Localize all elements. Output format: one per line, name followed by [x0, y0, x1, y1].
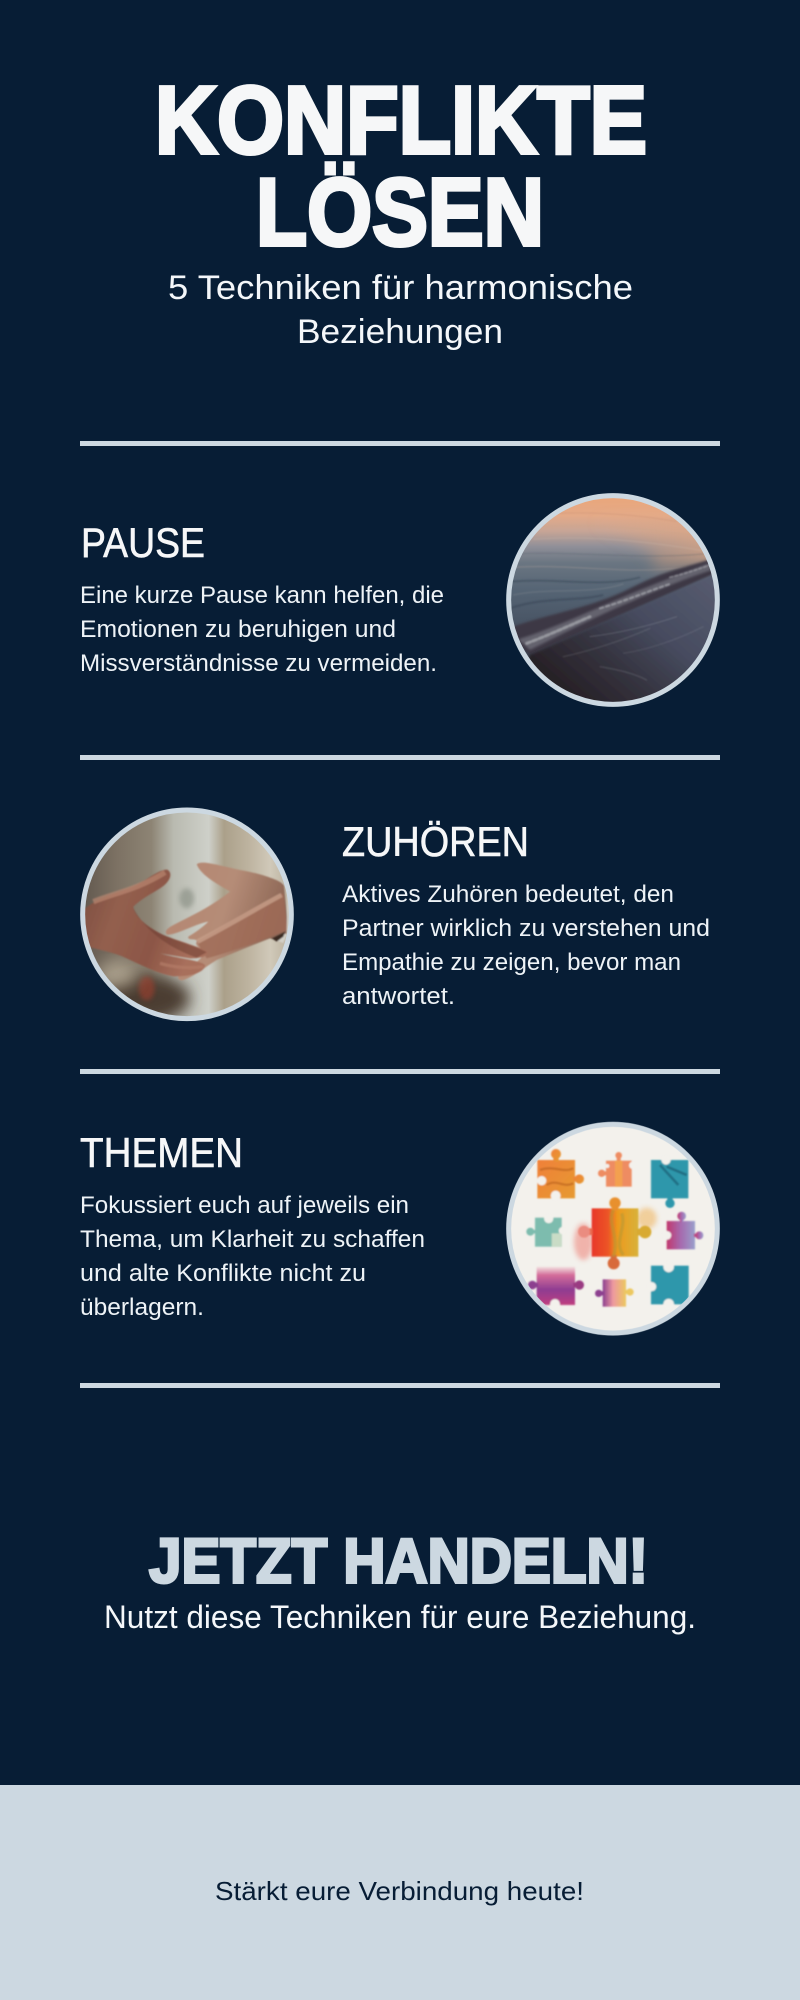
title: LÖSEN — [256, 159, 544, 266]
text block: zuhören: antwortet. — [342, 983, 455, 1010]
panel: themen — [80, 1120, 723, 1340]
subtitle: 5 Techniken für harmonische — [168, 269, 633, 307]
text block: themen: Thema, um Klarheit zu schaffen — [80, 1226, 425, 1253]
text block: themen: überlagern. — [80, 1294, 204, 1321]
footer text: Stärkt eure Verbindung heute! — [215, 1876, 584, 1906]
image: reaching hands — [77, 805, 297, 1025]
panel: zuhören — [77, 805, 710, 1025]
text block: zuhören: Empathie zu zeigen, bevor man — [342, 949, 681, 976]
heading: pause: PAUSE — [81, 519, 205, 566]
subtitle: Beziehungen — [297, 313, 503, 351]
panel: pause — [80, 490, 730, 713]
text block: zuhören — [342, 881, 710, 1010]
subtitle — [168, 269, 633, 351]
text block: pause: Missverständnisse zu vermeiden. — [80, 650, 437, 677]
title — [155, 67, 647, 266]
heading: themen: THEMEN — [80, 1129, 243, 1176]
text block: themen: und alte Konflikte nicht zu — [80, 1260, 366, 1287]
left hand — [83, 870, 207, 976]
text block: pause: Eine kurze Pause kann helfen, die — [80, 582, 444, 609]
title: KONFLIKTE — [155, 67, 647, 174]
image: beach at dusk — [503, 490, 730, 713]
call to action text: Nutzt diese Techniken für eure Beziehung. — [104, 1599, 696, 1635]
right hand — [166, 863, 288, 980]
heading: zuhören: ZUHÖREN — [342, 818, 529, 865]
text block: themen: Fokussiert euch auf jeweils ein — [80, 1192, 409, 1219]
footer band — [0, 1785, 800, 2000]
text block: zuhören: Aktives Zuhören bedeutet, den — [342, 881, 674, 908]
text block: zuhören: Partner wirklich zu verstehen und — [342, 915, 710, 942]
text block: pause: Emotionen zu beruhigen und — [80, 616, 396, 643]
text block: themen — [80, 1192, 425, 1321]
call to action heading: JETZT HANDELN! — [149, 1526, 648, 1596]
image: colorful puzzle pieces — [503, 1120, 723, 1340]
text block: pause — [80, 582, 444, 677]
